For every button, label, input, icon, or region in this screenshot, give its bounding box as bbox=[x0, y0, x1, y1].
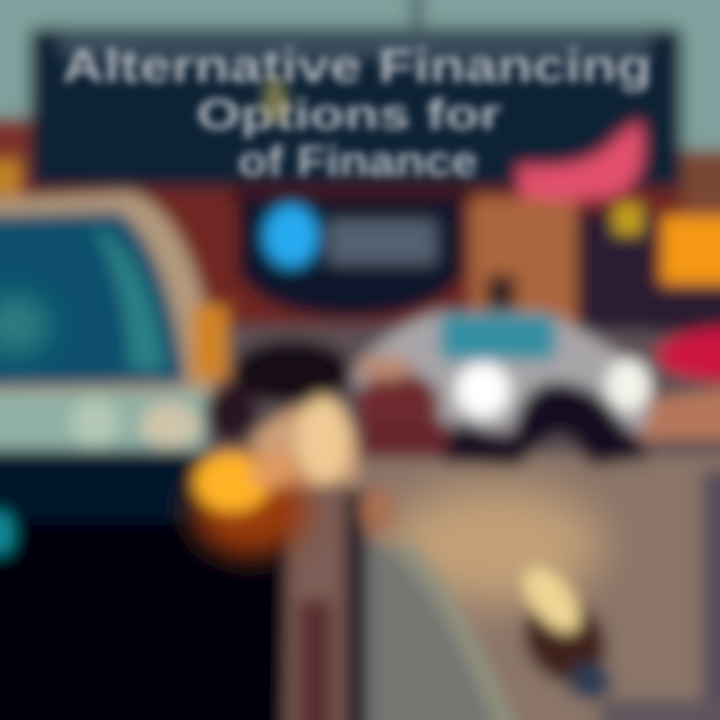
orange pillar bbox=[192, 305, 228, 380]
mid ground haze bbox=[0, 320, 720, 480]
red car far right bbox=[655, 326, 720, 382]
foreground car bbox=[0, 192, 300, 720]
orange sign bbox=[662, 216, 720, 284]
red band under panel bbox=[232, 184, 472, 202]
person bbox=[206, 340, 396, 720]
billboard title: of Finance bbox=[238, 137, 478, 186]
yellow accent on title bbox=[262, 78, 288, 122]
road bbox=[360, 455, 720, 720]
street band right bbox=[640, 385, 720, 440]
billboard title: Alternative Financing bbox=[62, 39, 652, 92]
distant white car bbox=[352, 312, 652, 466]
road marking bbox=[507, 558, 623, 700]
pink swoosh bbox=[518, 120, 643, 201]
amber headlight bbox=[192, 452, 308, 556]
billboard title bbox=[62, 39, 652, 186]
buildings bbox=[0, 118, 720, 333]
billboard panel bbox=[30, 0, 682, 188]
billboard title: Options for bbox=[196, 90, 502, 139]
dark sign with blue circle bbox=[238, 198, 464, 318]
sky bbox=[0, 0, 720, 160]
